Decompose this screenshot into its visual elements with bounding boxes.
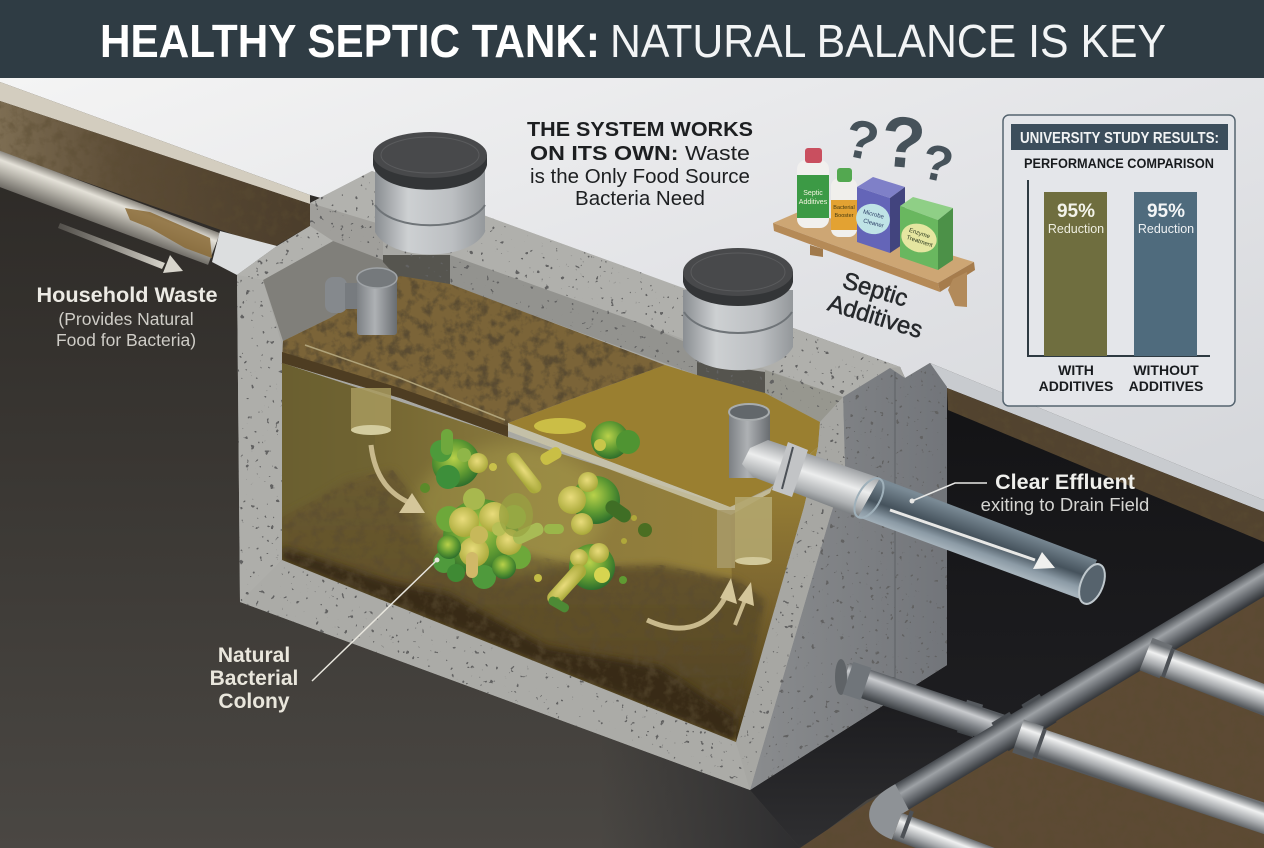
bottle: bacterial booster: Bacterial — [833, 205, 855, 211]
right liquid wedge — [730, 447, 818, 742]
tank silhouette — [237, 171, 947, 790]
axis label: without additives: WITHOUT — [1133, 362, 1199, 378]
concrete bottom rim — [240, 560, 750, 790]
bar: with additives: Reduction — [1048, 222, 1104, 236]
outlet pipe — [742, 440, 880, 517]
submerged inlet tube — [351, 388, 391, 431]
label: clear effluent: Clear Effluent — [995, 470, 1135, 494]
panel: university study results — [1003, 115, 1235, 406]
label: household waste: Household Waste — [36, 284, 218, 307]
surface cluster — [534, 418, 640, 459]
upper left cluster — [430, 429, 488, 489]
label: septic additives: Additives — [825, 290, 926, 344]
liquid surface — [508, 365, 820, 507]
panel subheading: PERFORMANCE COMPARISON — [1024, 156, 1214, 171]
water surface front edge — [508, 423, 772, 515]
title bar: NATURAL BALANCE IS KEY — [610, 15, 1166, 67]
box: enzyme treatment: Treatment — [905, 235, 933, 249]
concrete top-left ledge — [237, 226, 333, 280]
drain field pipes — [835, 558, 1264, 848]
main bacteria cluster — [433, 488, 545, 589]
natural bacterial colony illustration — [415, 418, 652, 614]
bottle: bacterial booster: Booster — [835, 213, 854, 219]
box: enzyme treatment — [898, 197, 953, 270]
axis label: without additives: ADDITIVES — [1129, 378, 1203, 394]
bar: without additives — [1134, 192, 1197, 356]
block top face — [310, 171, 483, 253]
drain pipe: cross run — [884, 558, 1264, 826]
box: microbe cleaner — [853, 177, 905, 253]
sludge layer — [282, 470, 765, 742]
effluent flow arrow — [890, 510, 1055, 569]
drain pipe: main right run — [1018, 729, 1264, 827]
label: clear effluent: exiting to Drain Field — [981, 494, 1149, 515]
drain pipe: lower return run — [897, 811, 1000, 848]
top slab front face — [450, 255, 697, 375]
label: natural bacterial colony — [210, 644, 298, 713]
panel heading: UNIVERSITY STUDY RESULTS: — [1020, 130, 1219, 147]
interior back wall — [263, 241, 450, 341]
slab top face — [450, 215, 900, 397]
manhole riser: right — [683, 248, 793, 370]
clear effluent tube — [848, 473, 1110, 608]
interior left wall haze — [282, 363, 375, 517]
text: the system works on its own: ON ITS OWN: Waste — [530, 142, 750, 165]
concrete texture — [237, 171, 947, 790]
label: natural bacterial colony: Natural — [218, 644, 290, 667]
bar chart — [1028, 180, 1210, 394]
text: the system works on its own — [527, 119, 753, 210]
bottle: bacterial booster — [831, 168, 857, 237]
title text: HEALTHY SEPTIC TANK: — [100, 15, 600, 67]
flow arrow: up to outlet — [647, 578, 754, 628]
bar: without additives: Reduction — [1138, 222, 1194, 236]
label: septic additives: Septic — [839, 267, 911, 312]
bottle: septic additives: Additives — [799, 199, 828, 206]
title bar — [0, 0, 1264, 78]
liquid front — [282, 363, 736, 742]
bottle: septic additives — [797, 148, 829, 228]
tank right side wall — [750, 363, 947, 790]
text: the system works on its own: is the Only Food Source — [530, 165, 750, 188]
inlet baffle tee — [325, 268, 397, 435]
block front face — [310, 203, 383, 260]
callout line: bacterial colony — [312, 558, 440, 681]
concrete septic tank — [237, 171, 947, 790]
inlet pipe — [0, 154, 277, 275]
concrete right rim — [736, 397, 845, 790]
outlet baffle — [717, 404, 772, 568]
axis label: with additives: ADDITIVES — [1039, 378, 1113, 394]
label: natural bacterial colony: Colony — [218, 690, 290, 713]
bottle: septic additives: Septic — [803, 190, 823, 197]
manhole riser: left — [373, 132, 487, 254]
scum layer — [282, 276, 665, 437]
callout line: clear effluent — [910, 483, 987, 504]
rod bacteria — [420, 445, 652, 614]
axis label: without additives — [1129, 362, 1203, 394]
bar: without additives: 95% — [1147, 201, 1185, 222]
bar: with additives — [1044, 192, 1107, 356]
panel heading — [1011, 124, 1228, 150]
text: the system works on its own: Bacteria Need — [575, 187, 705, 210]
additives shelf — [773, 101, 975, 344]
soil: lower right trench — [800, 580, 1264, 848]
box: enzyme treatment: Enzyme — [908, 228, 931, 240]
label: household waste: Food for Bacteria) — [56, 330, 196, 350]
drain pipe: from tank — [835, 659, 1000, 729]
box: microbe cleaner: Microbe — [862, 209, 885, 221]
text: the system works on its own: THE SYSTEM WORKS — [527, 119, 753, 141]
concrete left rim — [237, 275, 282, 602]
label: household waste — [36, 284, 218, 350]
question marks: ? — [917, 133, 958, 194]
wooden shelf — [773, 210, 974, 283]
label: household waste: (Provides Natural — [58, 309, 194, 329]
axis label: with additives — [1039, 362, 1113, 394]
soil strip: left — [0, 101, 310, 248]
label: clear effluent — [981, 470, 1149, 515]
question marks — [839, 101, 958, 194]
label: natural bacterial colony: Bacterial — [210, 667, 298, 690]
right cluster — [558, 472, 634, 535]
question marks: ? — [839, 108, 884, 173]
flow arrow: down to colony — [371, 445, 425, 513]
question marks: ? — [878, 101, 928, 185]
axis label: with additives: WITH — [1058, 362, 1094, 378]
box: microbe cleaner: Cleaner — [862, 218, 884, 230]
drain pipe: branch — [1146, 649, 1264, 710]
arrow: household waste flow — [58, 223, 183, 273]
bar: with additives: 95% — [1057, 201, 1095, 222]
lower cluster — [544, 543, 615, 608]
